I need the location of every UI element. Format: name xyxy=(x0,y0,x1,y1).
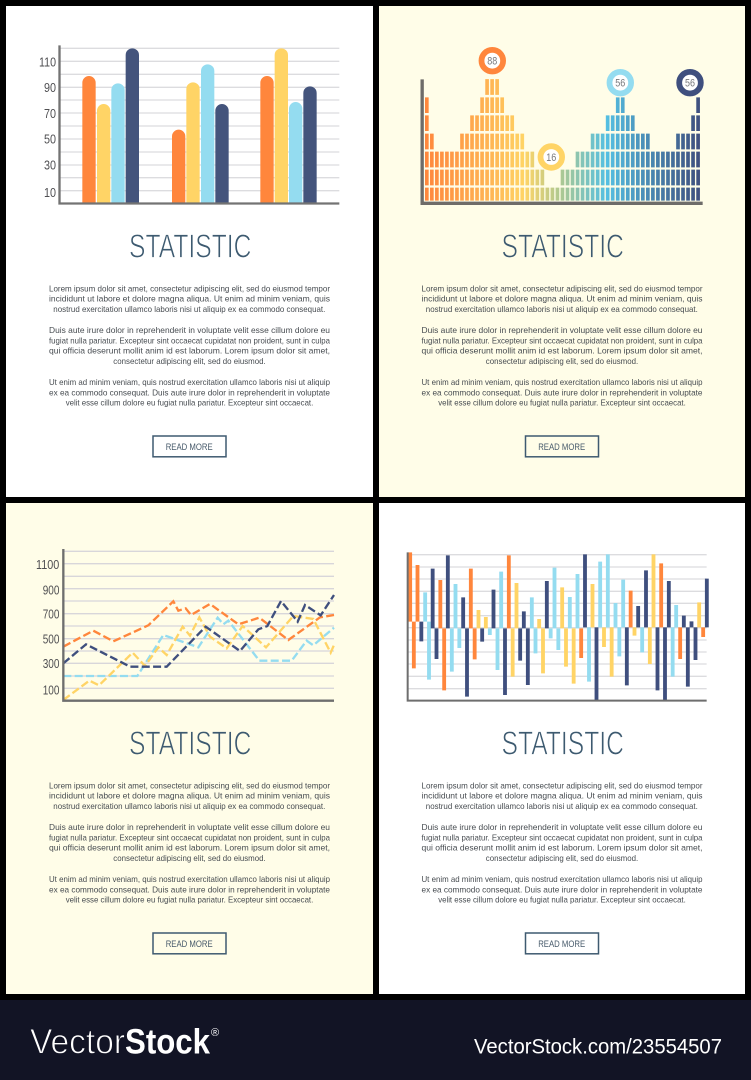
body text: nostrud exercitation ullamco laboris nisi ut aliquip ex ea commodo consequat. xyxy=(426,801,698,811)
marker: 56 navy: 56 xyxy=(685,78,695,90)
body text: Duis aute irure dolor in reprehenderit in voluptate velit esse cillum dolore eu xyxy=(422,822,703,832)
body text: consectetur adipiscing elit, sed do eiusmod. xyxy=(486,356,638,366)
marker: 16: 16 xyxy=(546,152,556,164)
body text xyxy=(422,780,703,905)
body text: consectetur adipiscing elit, sed do eiusmod. xyxy=(486,853,638,863)
axis labels: 300 xyxy=(43,656,59,671)
axis labels: 110 xyxy=(39,54,56,69)
marker: 16 xyxy=(540,146,562,168)
body text xyxy=(49,780,330,905)
body text: ex ea commodo consequat. Duis aute irure dolor in reprehenderit in voluptate xyxy=(49,387,330,397)
VectorStock logo: Stock xyxy=(125,1022,210,1062)
read more button xyxy=(526,436,598,457)
body text: ex ea commodo consequat. Duis aute irure dolor in reprehenderit in voluptate xyxy=(422,884,703,894)
read more button xyxy=(153,436,226,457)
axis labels: 70 xyxy=(44,106,56,121)
axis labels: 100 xyxy=(43,682,59,698)
axis labels xyxy=(36,557,59,698)
body text: fugiat nulla pariatur. Excepteur sint occaecat cupidatat non proident, sunt in culpa xyxy=(49,335,330,345)
body text: qui officia deserunt mollit anim id est laborum. Lorem ipsum dolor sit amet, xyxy=(422,346,702,356)
body text: qui officia deserunt mollit anim id est laborum. Lorem ipsum dolor sit amet, xyxy=(49,346,330,356)
body text: Ut enim ad minim veniam, quis nostrud exercitation ullamco laboris nisi ut aliquip xyxy=(422,377,703,387)
body text: ex ea commodo consequat. Duis aute irure dolor in reprehenderit in voluptate xyxy=(49,884,330,894)
body text: Lorem ipsum dolor sit amet, consectetur adipiscing elit, sed do eiusmod tempor xyxy=(49,780,330,790)
axis labels: 50 xyxy=(44,132,56,146)
marker: 88: 88 xyxy=(487,56,497,68)
panel: diverging bars card xyxy=(379,503,745,994)
body text: fugiat nulla pariatur. Excepteur sint occaecat cupidatat non proident, sunt in culpa xyxy=(422,335,703,345)
axis labels: 500 xyxy=(43,632,59,646)
body text xyxy=(49,283,330,408)
body text: incididunt ut labore et dolore magna aliqua. Ut enim ad minim veniam, quis xyxy=(422,791,702,801)
body text: Duis aute irure dolor in reprehenderit in voluptate velit esse cillum dolore eu xyxy=(422,325,703,335)
VectorStock logo: Vector xyxy=(30,1022,125,1062)
panel: pixel histogram card xyxy=(379,6,745,497)
body text: Lorem ipsum dolor sit amet, consectetur adipiscing elit, sed do eiusmod tempor xyxy=(422,283,703,293)
body text: incididunt ut labore et dolore magna aliqua. Ut enim ad minim veniam, quis xyxy=(422,294,702,304)
body text: consectetur adipiscing elit, sed do eiusmod. xyxy=(113,853,266,863)
body text: Lorem ipsum dolor sit amet, consectetur adipiscing elit, sed do eiusmod tempor xyxy=(422,780,703,790)
body text: incididunt ut labore et dolore magna aliqua. Ut enim ad minim veniam, quis xyxy=(49,791,330,801)
marker: 56 cyan xyxy=(610,72,631,93)
heading: STATISTIC xyxy=(502,228,624,266)
dashed line chart xyxy=(63,549,334,701)
axis labels xyxy=(39,54,56,200)
body text: Duis aute irure dolor in reprehenderit in voluptate velit esse cillum dolore eu xyxy=(49,822,330,832)
read more button: READ MORE xyxy=(538,939,585,950)
stacked histogram chart xyxy=(422,79,703,203)
marker: 56 cyan: 56 xyxy=(615,78,625,90)
heading: STATISTIC xyxy=(129,726,252,762)
body text: fugiat nulla pariatur. Excepteur sint occaecat cupidatat non proident, sunt in culpa xyxy=(422,832,703,842)
VectorStock logo: ® xyxy=(211,1027,219,1039)
body text: nostrud exercitation ullamco laboris nisi ut aliquip ex ea commodo consequat. xyxy=(426,304,698,314)
axis labels: 900 xyxy=(43,582,59,598)
marker: 56 navy xyxy=(679,72,701,93)
axis labels: 30 xyxy=(44,157,56,172)
axis labels: 10 xyxy=(44,185,56,200)
footer background xyxy=(0,1000,751,1080)
heading: STATISTIC xyxy=(129,228,252,266)
axis labels: 90 xyxy=(44,80,56,95)
body text: qui officia deserunt mollit anim id est laborum. Lorem ipsum dolor sit amet, xyxy=(422,843,702,853)
body text: Ut enim ad minim veniam, quis nostrud exercitation ullamco laboris nisi ut aliquip xyxy=(49,377,330,387)
body text: Ut enim ad minim veniam, quis nostrud exercitation ullamco laboris nisi ut aliquip xyxy=(422,874,703,884)
body text: fugiat nulla pariatur. Excepteur sint occaecat cupidatat non proident, sunt in culpa xyxy=(49,832,330,842)
body text: Duis aute irure dolor in reprehenderit in voluptate velit esse cillum dolore eu xyxy=(49,325,330,335)
body text: consectetur adipiscing elit, sed do eiusmod. xyxy=(113,356,266,366)
heading: STATISTIC xyxy=(502,726,624,762)
body text: Ut enim ad minim veniam, quis nostrud exercitation ullamco laboris nisi ut aliquip xyxy=(49,874,330,884)
body text: velit esse cillum dolore eu fugiat nulla pariatur. Excepteur sint occaecat. xyxy=(438,895,686,905)
marker: 88 xyxy=(482,50,503,72)
read more button: READ MORE xyxy=(166,442,213,453)
body text: velit esse cillum dolore eu fugiat nulla pariatur. Excepteur sint occaecat. xyxy=(66,895,313,905)
card background xyxy=(6,6,373,497)
body text: velit esse cillum dolore eu fugiat nulla pariatur. Excepteur sint occaecat. xyxy=(438,398,686,408)
read more button: READ MORE xyxy=(166,939,213,950)
read more button xyxy=(526,933,598,954)
body text: incididunt ut labore et dolore magna aliqua. Ut enim ad minim veniam, quis xyxy=(49,294,330,304)
read more button xyxy=(153,933,226,954)
VectorStock logo xyxy=(30,1022,219,1062)
panel: bar chart card xyxy=(6,6,373,497)
body text: velit esse cillum dolore eu fugiat nulla pariatur. Excepteur sint occaecat. xyxy=(66,398,313,408)
card background xyxy=(379,503,745,994)
axis labels: 700 xyxy=(43,606,59,622)
body text: qui officia deserunt mollit anim id est laborum. Lorem ipsum dolor sit amet, xyxy=(49,843,330,853)
rounded bar chart xyxy=(59,45,339,203)
axis labels: 1100 xyxy=(36,557,59,572)
footer: watermark bar xyxy=(0,1000,751,1080)
body text: ex ea commodo consequat. Duis aute irure dolor in reprehenderit in voluptate xyxy=(422,387,703,397)
body text: Lorem ipsum dolor sit amet, consectetur adipiscing elit, sed do eiusmod tempor xyxy=(49,283,330,293)
body text xyxy=(422,283,703,408)
read more button: READ MORE xyxy=(538,442,585,453)
body text: nostrud exercitation ullamco laboris nisi ut aliquip ex ea commodo consequat. xyxy=(53,304,325,314)
card background xyxy=(6,503,373,994)
stock image id: VectorStock.com/23554507 xyxy=(474,1035,722,1058)
card background xyxy=(379,6,745,497)
body text: nostrud exercitation ullamco laboris nisi ut aliquip ex ea commodo consequat. xyxy=(53,801,325,811)
panel: line chart card xyxy=(6,503,373,994)
diverging bar chart xyxy=(408,552,707,701)
